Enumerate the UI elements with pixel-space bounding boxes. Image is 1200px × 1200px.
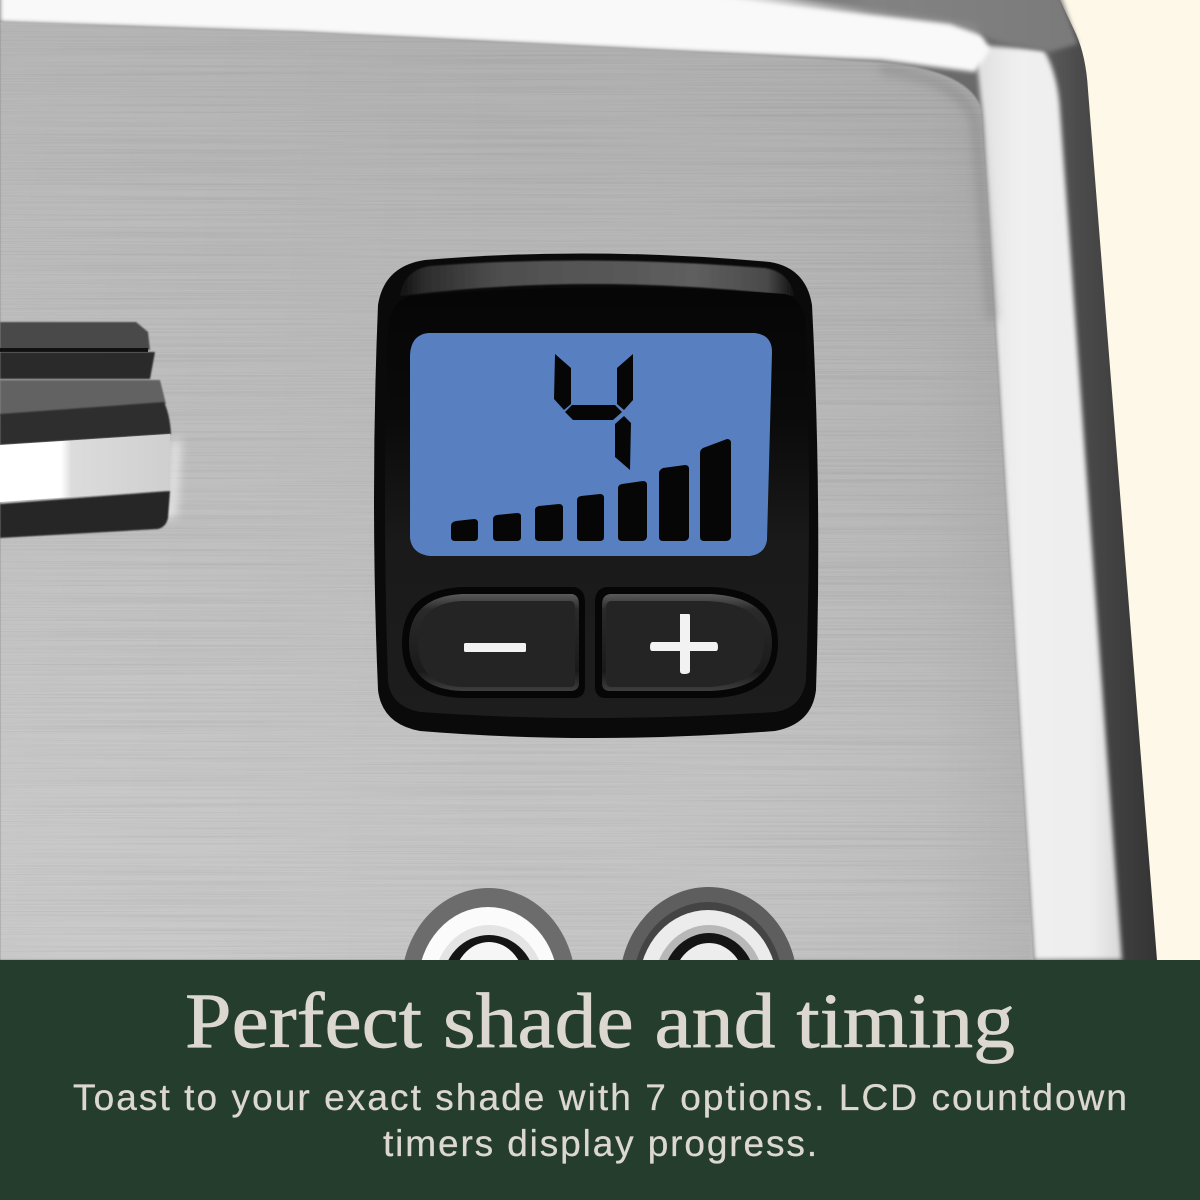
button chrome ring: [639, 910, 777, 1060]
button inner ring: [654, 925, 764, 1045]
band background: [0, 960, 1200, 1200]
button centre: [453, 942, 525, 1028]
button black ring: [662, 933, 756, 1037]
panel inner face: [385, 287, 809, 718]
shadow along the face corner: [880, 70, 992, 320]
brushed steel front face: [0, 22, 1034, 960]
handle bottom dark: [0, 491, 170, 538]
button inner ring: [434, 925, 544, 1045]
button black ring: [442, 935, 536, 1035]
LCD digit 4: [554, 354, 633, 470]
plus glyph: [650, 614, 718, 674]
handle lower dark band: [0, 402, 171, 445]
bright bevel stripe: [975, 45, 1122, 960]
handle groove shadow: [0, 352, 155, 379]
LCD shade level bars: [451, 439, 731, 541]
minus glyph: [464, 643, 526, 652]
body text: [73, 1077, 1127, 1164]
body text: Toast to your exact shade with 7 options. LCD countdown: [73, 1077, 1127, 1118]
body text: timers display progress.: [383, 1123, 817, 1164]
brushed texture: [0, 25, 1030, 960]
right round button: [620, 887, 798, 1083]
slider lever handle: [0, 322, 176, 538]
handle dark groove: [0, 348, 148, 352]
button chrome ring: [418, 907, 558, 1063]
minus button: [402, 587, 585, 698]
button centre: [673, 943, 745, 1027]
handle soft highlight: [0, 440, 176, 526]
heading: Perfect shade and timing: [185, 977, 1015, 1064]
plus button: [595, 587, 778, 698]
panel bezel: [374, 253, 818, 738]
control panel: [374, 253, 818, 738]
grey shading on top corner: [700, 0, 1078, 52]
toaster body: [0, 0, 1157, 960]
caption band: [0, 960, 1200, 1200]
LCD screen: [410, 333, 772, 556]
left round button: [402, 888, 576, 1082]
top edge white band: [0, 0, 990, 72]
button dark inner rim: [633, 902, 783, 1068]
button dark rim: [620, 887, 798, 1083]
body silhouette: dark right edge: [0, 0, 1157, 960]
handle upper band: [0, 322, 150, 350]
button dark rim: [402, 888, 576, 1082]
chrome strip: [0, 434, 170, 502]
panel top gloss: [400, 260, 794, 296]
handle mid band: [0, 380, 166, 416]
face horizontal shading: [0, 22, 1034, 960]
